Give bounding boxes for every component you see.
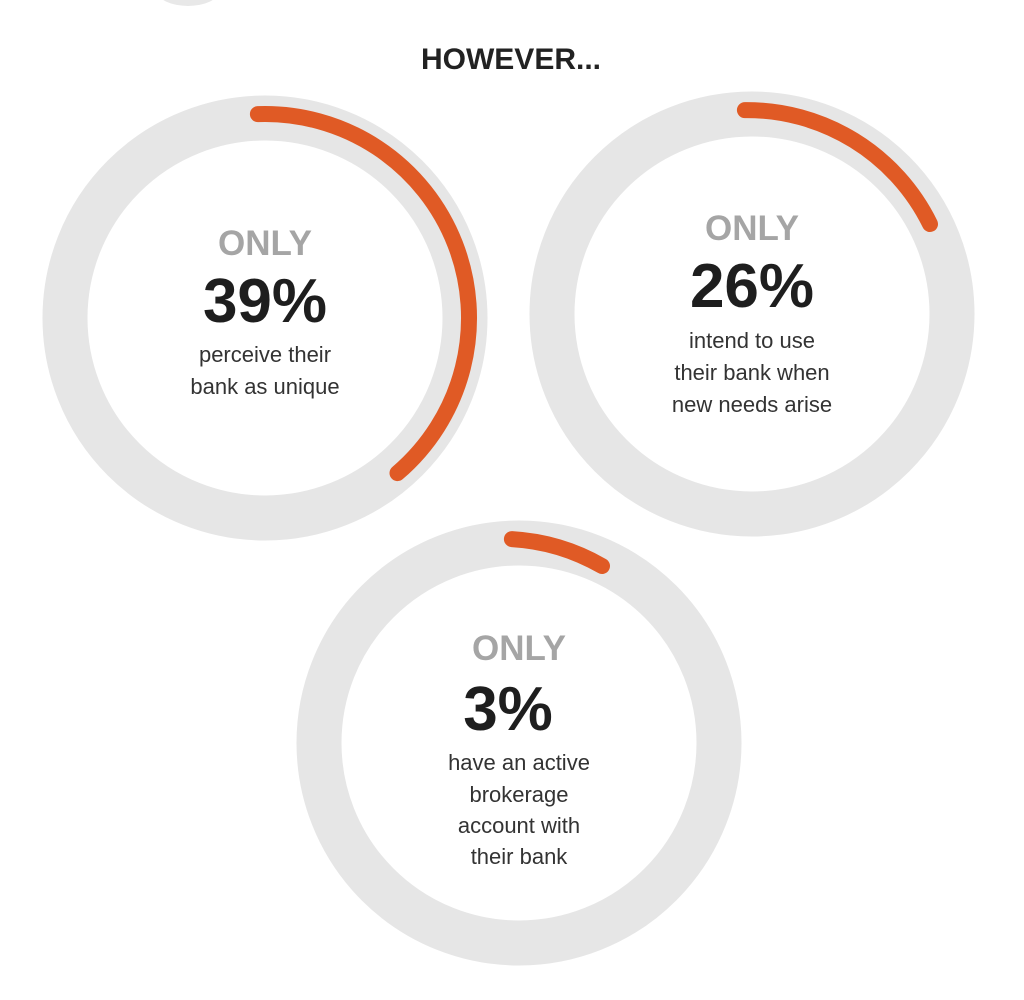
- text 39%: 39%: [203, 267, 327, 336]
- text 39%: perceive their: [199, 342, 331, 367]
- text 3%: [448, 629, 590, 869]
- arc 26%: [745, 110, 930, 224]
- text 3%: account with: [458, 813, 580, 838]
- text 26%: new needs arise: [672, 392, 832, 417]
- text 3%: have an active: [448, 750, 590, 775]
- panel: 3% ring: [319, 539, 719, 943]
- text 3%: their bank: [471, 844, 568, 869]
- title: HOWEVER...: [421, 43, 601, 76]
- text 39%: bank as unique: [190, 374, 340, 399]
- arc 3%: [512, 539, 602, 566]
- text 26%: intend to use: [689, 328, 815, 353]
- text 26%: ONLY: [705, 209, 799, 248]
- panel: 26% ring: [552, 110, 952, 514]
- text 39%: [190, 224, 340, 399]
- text 26%: [672, 209, 832, 417]
- text 26%: their bank when: [674, 360, 830, 385]
- text 3%: brokerage: [469, 782, 569, 807]
- partial circle at top edge: [158, 0, 218, 6]
- text 3%: ONLY: [472, 629, 566, 668]
- text 3%: 3%: [463, 675, 553, 744]
- panel: 39% ring: [65, 114, 469, 518]
- text 39%: ONLY: [218, 224, 312, 263]
- text 26%: 26%: [690, 252, 814, 321]
- arc 39%: [258, 114, 469, 473]
